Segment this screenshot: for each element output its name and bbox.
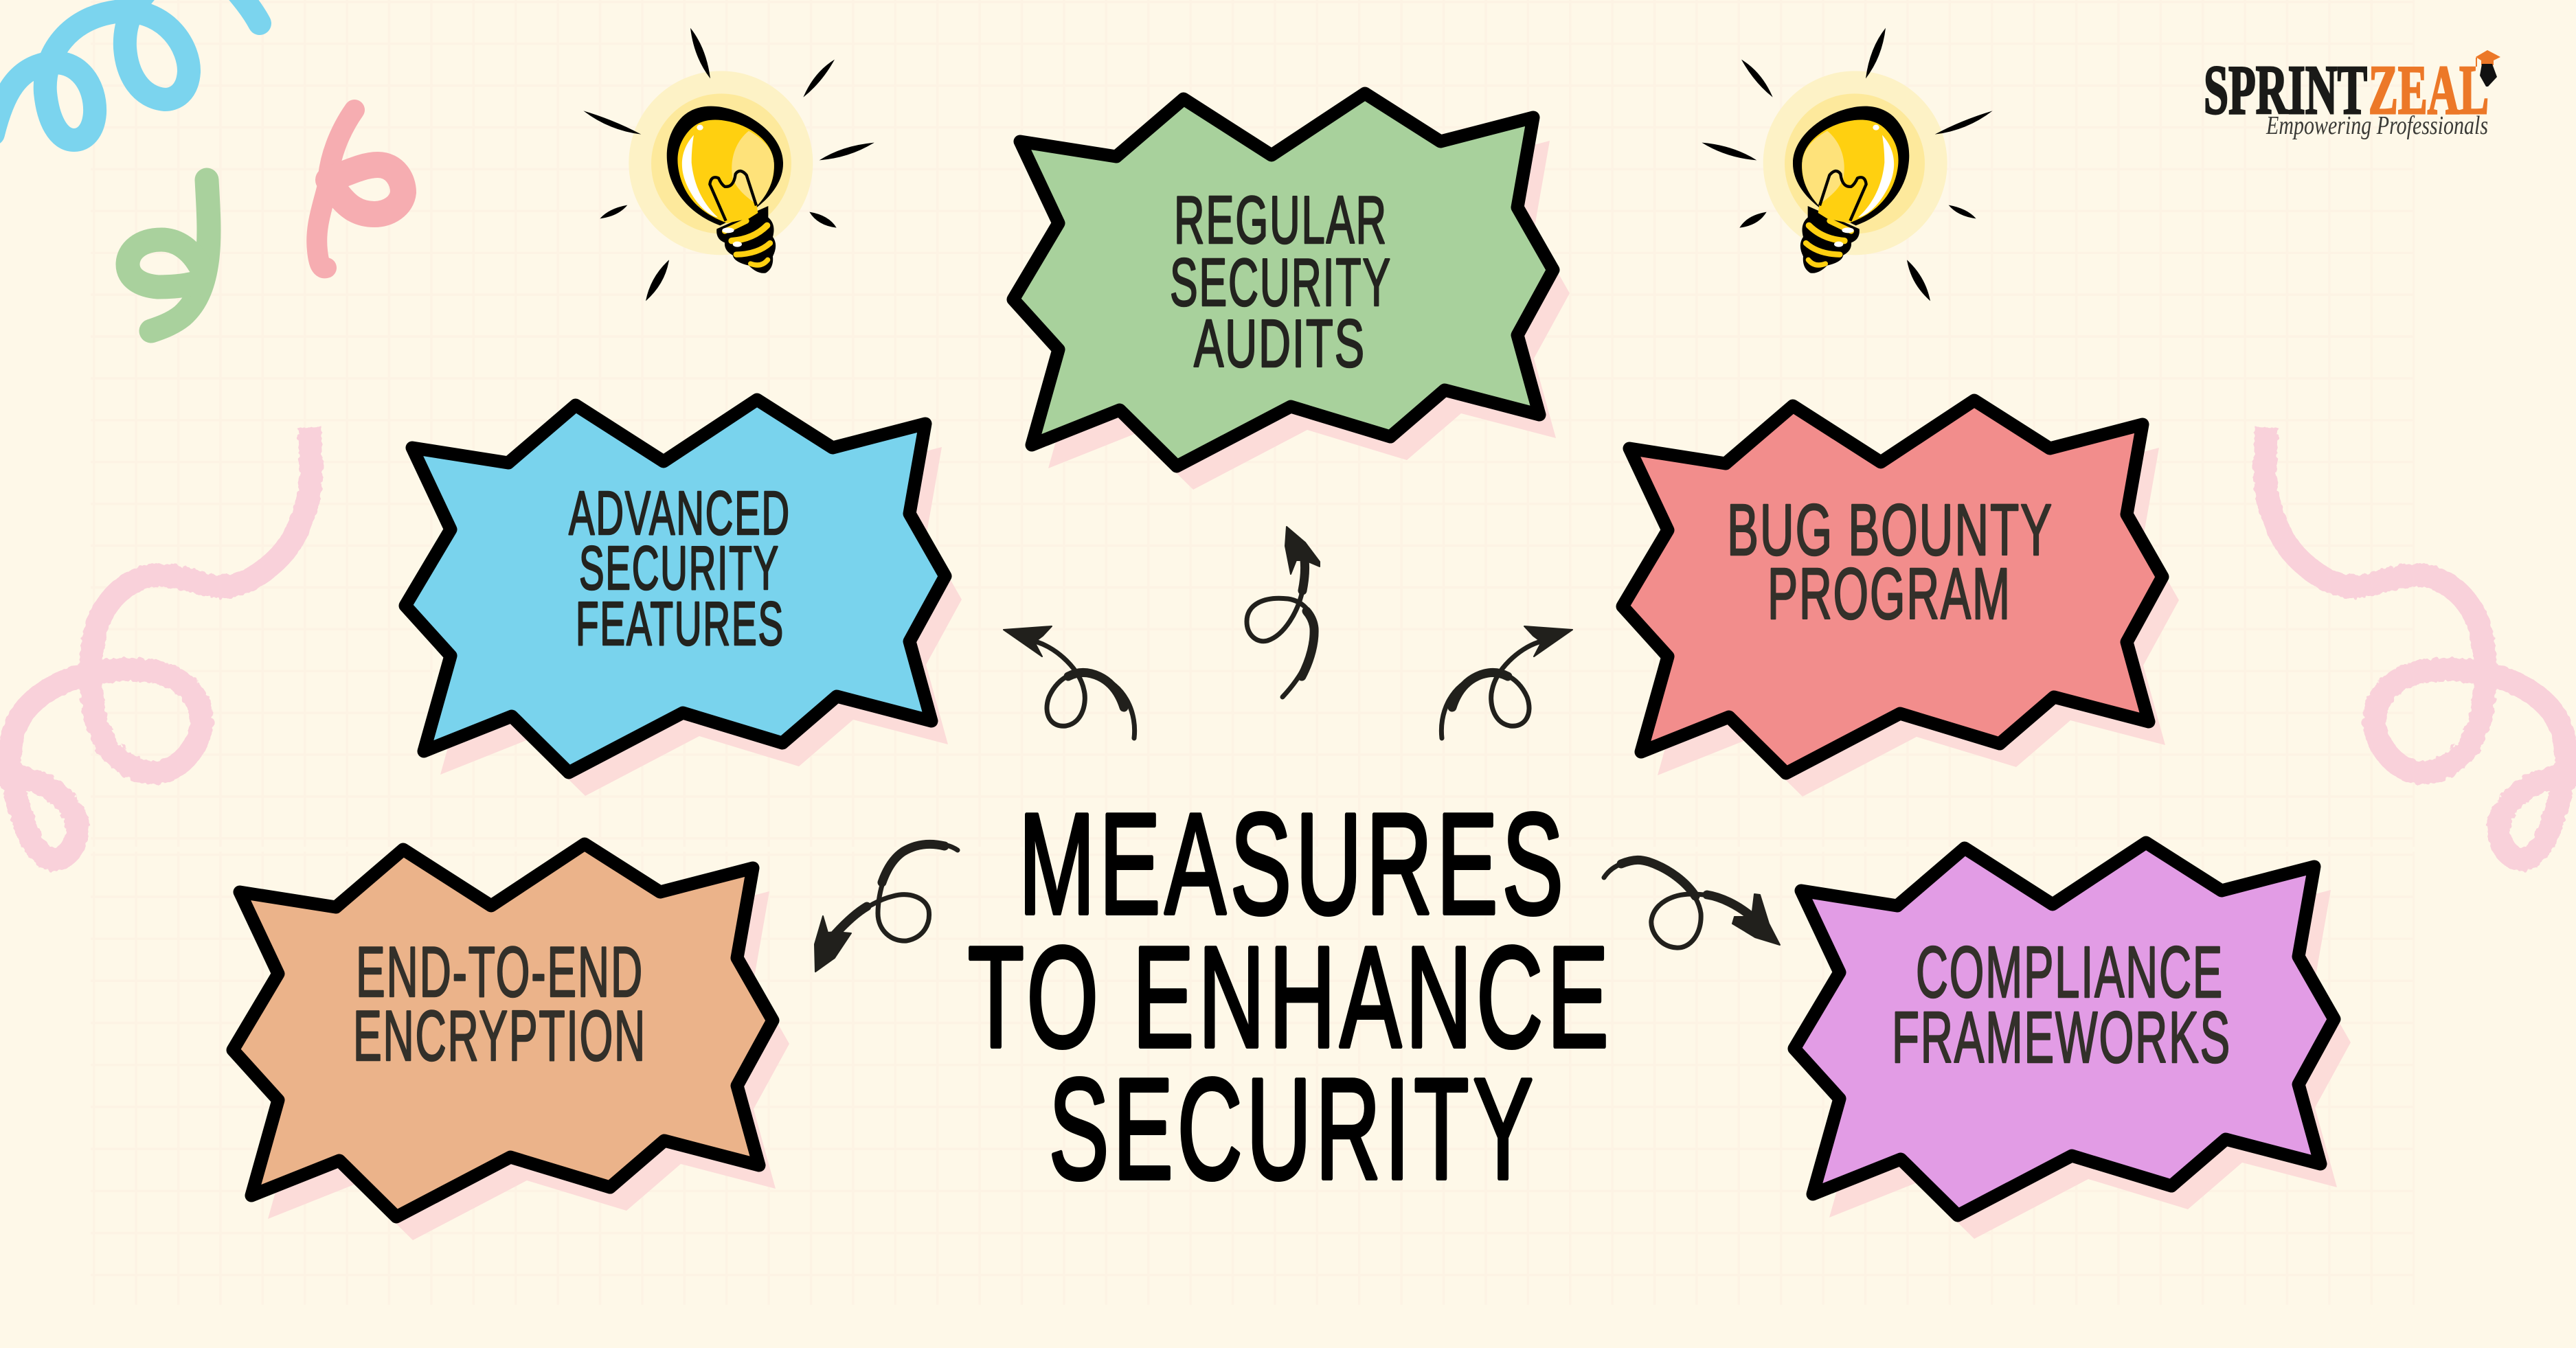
panel: bug bounty program: PROGRAM <box>1767 553 2011 635</box>
logo: Sprintzeal: Empowering Professionals <box>2266 111 2488 140</box>
arrow: to advanced security features <box>1004 626 1135 738</box>
panel: regular security audits: AUDITS <box>1194 306 1366 381</box>
squiggle: pink left <box>0 427 310 859</box>
arrow: to regular security audits <box>1247 527 1320 697</box>
panel: regular security audits <box>1013 93 1570 490</box>
panel: advanced security features: FEATURES <box>576 590 784 659</box>
title: TO ENHANCE <box>968 917 1613 1077</box>
panel: compliance frameworks: COMPLIANCE <box>1916 932 2224 1013</box>
logo: Sprintzeal: ZEAL <box>2369 52 2489 129</box>
title: MEASURES <box>1019 784 1568 944</box>
panel: advanced security features: SECURITY <box>579 534 780 603</box>
panel: end-to-end encryption <box>233 844 789 1240</box>
squiggle: pink <box>317 110 403 268</box>
title: SECURITY <box>1049 1049 1537 1209</box>
panel: bug bounty program <box>1623 400 2179 797</box>
panel: regular security audits: REGULAR <box>1174 182 1388 258</box>
squiggle: blue corner <box>0 0 260 140</box>
logo: Sprintzeal: SPRINT <box>2204 52 2367 129</box>
squiggle: green <box>128 180 209 331</box>
panel: regular security audits: SECURITY <box>1170 244 1392 320</box>
arrow: to end-to-end encryption <box>815 843 958 972</box>
lightbulb right <box>1702 28 1993 301</box>
panel: advanced security features <box>405 400 962 796</box>
arrow: to bug bounty program <box>1441 626 1572 738</box>
panel: compliance frameworks <box>1794 843 2351 1239</box>
panel: advanced security features: ADVANCED <box>569 479 791 548</box>
panel: end-to-end encryption: END-TO-END <box>356 933 644 1012</box>
lightbulb left <box>583 28 874 301</box>
panel: bug bounty program: BUG BOUNTY <box>1727 490 2053 571</box>
title <box>968 784 1613 1209</box>
squiggle: pink right <box>2266 427 2576 859</box>
arrow: to compliance frameworks <box>1604 860 1780 948</box>
panel: end-to-end encryption: ENCRYPTION <box>353 996 646 1076</box>
panel: compliance frameworks: FRAMEWORKS <box>1892 997 2231 1078</box>
